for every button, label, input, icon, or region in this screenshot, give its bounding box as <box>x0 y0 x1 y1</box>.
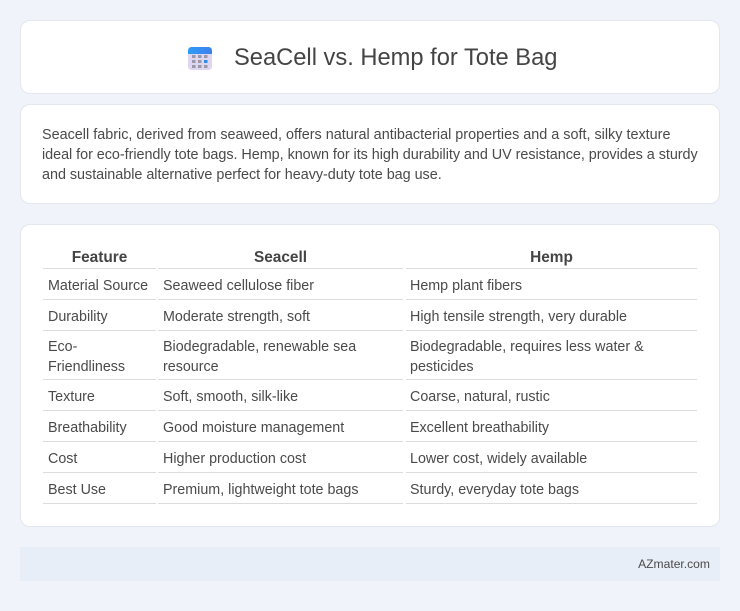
row: material source: Material Source <box>48 278 148 294</box>
row: material source <box>48 278 522 294</box>
row: breathability: Excellent breathability <box>410 420 549 436</box>
summary text: ideal for eco-friendly tote bags. Hemp, known for its high durability and UV resistance, provides a sturdy <box>42 147 698 163</box>
row: durability: High tensile strength, very durable <box>410 309 627 325</box>
row: cost <box>48 451 587 467</box>
table header: Seacell <box>254 249 307 266</box>
panel: title card <box>20 20 720 94</box>
table header: Feature <box>72 249 127 266</box>
row: breathability <box>48 420 549 436</box>
row: breathability: Breathability <box>48 420 127 436</box>
row: durability <box>48 309 627 325</box>
row: best use: Best Use <box>48 482 106 498</box>
row: breathability: Good moisture management <box>163 420 344 436</box>
icon: calendar <box>188 47 212 70</box>
row: cost: Cost <box>48 451 77 467</box>
row: eco-friendliness: Biodegradable, renewable sea <box>163 339 356 355</box>
row: eco-friendliness: Eco- <box>48 339 77 355</box>
row: durability: Moderate strength, soft <box>163 309 310 325</box>
row: eco-friendliness <box>48 339 644 375</box>
row: best use: Premium, lightweight tote bags <box>163 482 358 498</box>
table header: Hemp <box>530 249 573 266</box>
row: material source: Seaweed cellulose fiber <box>163 278 314 294</box>
summary text <box>42 127 698 183</box>
panel: comparison table <box>20 224 720 527</box>
row: durability: Durability <box>48 309 108 325</box>
summary text: Seacell fabric, derived from seaweed, offers natural antibacterial properties and a soft, silky texture <box>42 127 670 143</box>
row: eco-friendliness: pesticides <box>410 359 474 375</box>
title: SeaCell vs. Hemp for Tote Bag <box>234 45 557 71</box>
row: texture: Texture <box>48 389 95 405</box>
row: eco-friendliness: resource <box>163 359 219 375</box>
row: cost: Lower cost, widely available <box>410 451 587 467</box>
footer bar <box>20 547 720 581</box>
row: texture <box>48 389 550 405</box>
row: eco-friendliness: Friendliness <box>48 359 125 375</box>
row: material source: Hemp plant fibers <box>410 278 522 294</box>
row: eco-friendliness: Biodegradable, requires less water & <box>410 339 644 355</box>
panel: summary <box>20 104 720 204</box>
summary text: and sustainable alternative perfect for heavy-duty tote bag use. <box>42 167 442 183</box>
row: best use <box>48 482 579 498</box>
row: cost: Higher production cost <box>163 451 306 467</box>
row: texture: Coarse, natural, rustic <box>410 389 550 405</box>
row: texture: Soft, smooth, silk-like <box>163 389 298 405</box>
row: best use: Sturdy, everyday tote bags <box>410 482 579 498</box>
table header <box>72 249 573 266</box>
footer credit: AZmater.com <box>638 557 710 571</box>
